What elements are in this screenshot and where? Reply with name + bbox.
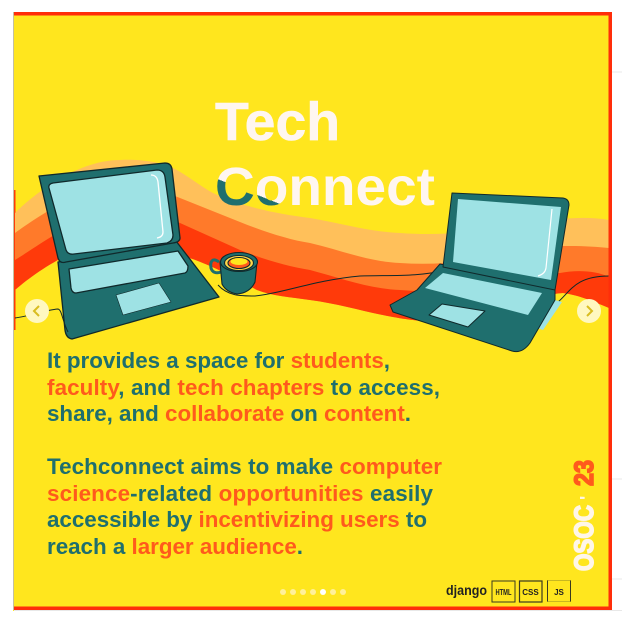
wave: orange band (15, 185, 609, 322)
wave: red band (15, 209, 609, 322)
icon: left laptop (39, 163, 219, 339)
tech logos: django, HTML, CSS, JS: django (446, 582, 487, 598)
text block: second paragraph: reach a larger audience. (47, 534, 303, 559)
right carousel arrow (577, 299, 601, 323)
icon: coffee cup (211, 252, 258, 294)
icon: right laptop (390, 193, 569, 352)
tech logos: django, HTML, CSS, JS (446, 580, 570, 602)
text block: second paragraph: Techconnect aims to make computer (47, 454, 442, 479)
vertical label: OSOC '23: OSOC (569, 505, 599, 571)
tech logos: django, HTML, CSS, JS: JS (554, 588, 565, 597)
cables (15, 270, 609, 332)
text block: first paragraph: share, and collaborate on content. (47, 401, 411, 426)
vertical label: OSOC '23: 23 (569, 460, 599, 486)
text block: first paragraph: It provides a space for students, (47, 348, 390, 373)
tech logos: django, HTML, CSS, JS: HTML (496, 588, 512, 597)
carousel pagination dots (280, 589, 346, 595)
title: Connect (215, 157, 435, 217)
title: Tech (215, 92, 340, 152)
text block: second paragraph: science-related opportunities easily (47, 481, 434, 506)
text block: second paragraph (47, 454, 442, 559)
text block: first paragraph (47, 348, 440, 426)
tech logos: django, HTML, CSS, JS: CSS (522, 588, 539, 597)
vertical label: OSOC '23: ' (577, 496, 597, 500)
wave: light orange band (15, 160, 609, 322)
text block: second paragraph: accessible by incentivizing users to (47, 507, 427, 532)
title (215, 92, 435, 217)
left carousel arrow (25, 299, 49, 323)
text block: first paragraph: faculty, and tech chapters to access, (47, 375, 440, 400)
